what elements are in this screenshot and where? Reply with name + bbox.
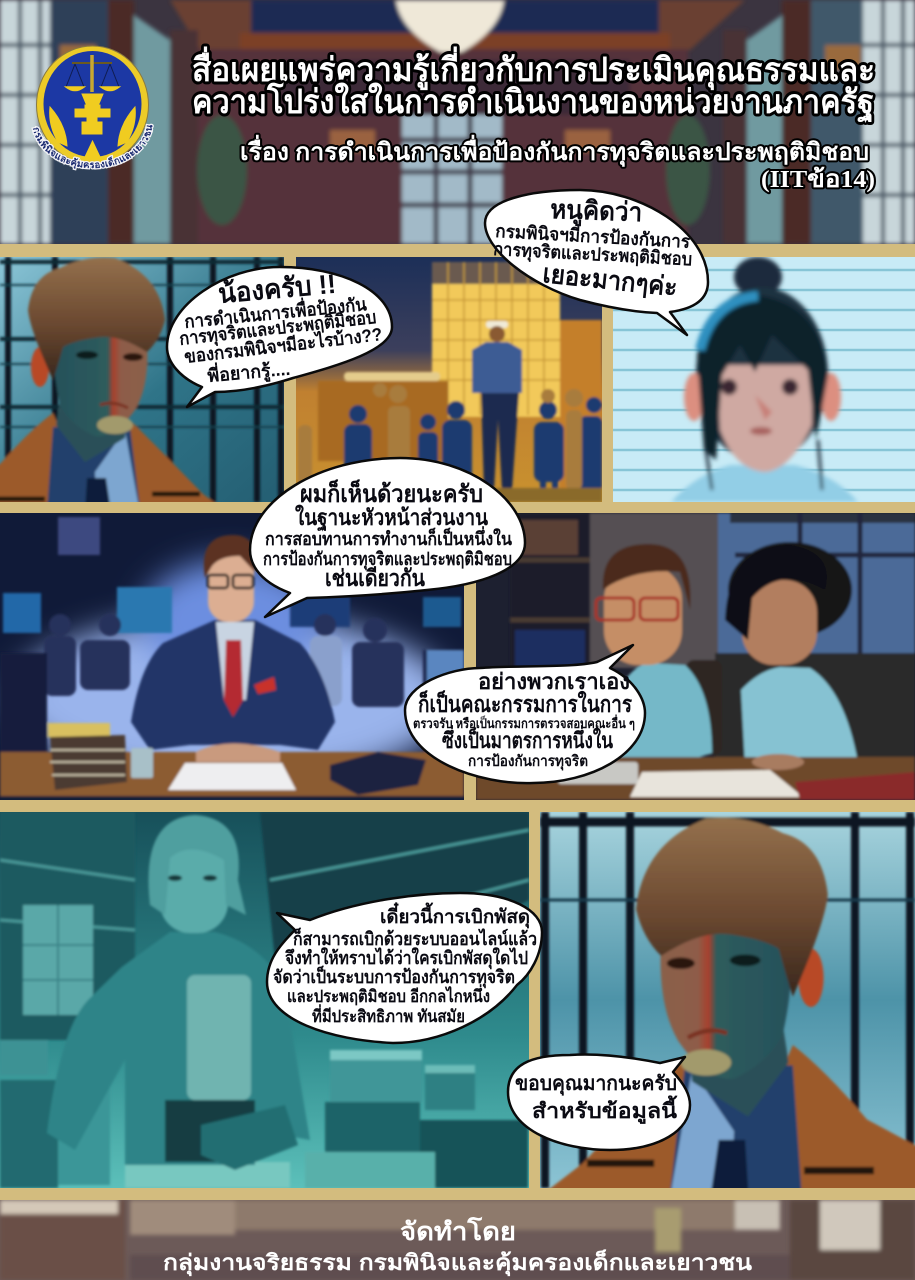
speech bubble: girl answer bbox=[485, 190, 708, 335]
footer heading: จัดทำโดย bbox=[400, 1216, 516, 1246]
panel: officer and children bbox=[296, 257, 602, 502]
bubble text: ตรวจรับ หรือเป็นกรรมการตรวจสอบคณะอื่น ๆ bbox=[413, 714, 635, 731]
title: ความโปร่งใสในการดำเนินงานของหน่วยงานภาครัฐ bbox=[192, 82, 874, 123]
speech bubble: warehouse bbox=[267, 893, 542, 1043]
bubble text: การทุจริตและประพฤติมิชอบ bbox=[493, 239, 693, 271]
bubble text: และประพฤติมิชอบ อีกกลไกหนึ่ง bbox=[287, 984, 490, 1006]
bubble text: ซึ่งเป็นมาตรการหนึ่งใน bbox=[442, 724, 613, 753]
desk books and glass bbox=[48, 723, 426, 795]
bubble text: อย่างพวกเราเอง bbox=[478, 669, 630, 694]
bubble text: กรมพินิจฯมีการป้องกันการ bbox=[495, 221, 691, 252]
character: girl bbox=[671, 257, 858, 502]
title bbox=[192, 46, 875, 123]
boy with red glasses bbox=[596, 544, 712, 760]
icon: scales and pedestal bbox=[50, 55, 135, 159]
bubble text bbox=[273, 902, 537, 1026]
children bbox=[344, 397, 602, 502]
footer panel bbox=[0, 1200, 915, 1280]
bubble text bbox=[178, 269, 383, 388]
panel: young man thanks bbox=[524, 812, 915, 1208]
bubble text: การสอบทานการทำงานก็เป็นหนึ่งใน bbox=[265, 526, 513, 549]
title: สื่อเผยแพร่ความรู้เกี่ยวกับการประเมินคุณธรรมและ bbox=[192, 46, 875, 91]
bubble text: จัดว่าเป็นระบบการป้องกันการทุจริต bbox=[273, 965, 515, 989]
bubble text: ขอบคุณมากนะครับ bbox=[515, 1073, 677, 1096]
bubble text: ก็เป็นคณะกรรมการในการ bbox=[418, 689, 633, 717]
panel: young man asks bbox=[0, 257, 284, 525]
bubble text: เดี๋ยวนี้การเบิกพัสดุ bbox=[380, 902, 530, 929]
panel: warehouse woman bbox=[0, 812, 529, 1188]
logo caption: กรมพินิจและคุ้มครองเด็กและเยาวชน bbox=[31, 124, 154, 170]
panel: girl answers bbox=[613, 257, 915, 502]
background staff bbox=[44, 614, 404, 707]
bubble text: หนูคิดว่า bbox=[550, 194, 643, 229]
panel: committee colleagues bbox=[476, 513, 915, 800]
logo: department emblem bbox=[31, 46, 154, 170]
bubble text bbox=[263, 479, 513, 591]
character: young man bbox=[0, 257, 218, 502]
bubble text: น้องครับ !! bbox=[217, 269, 337, 309]
bubble text bbox=[493, 194, 693, 302]
bubble text: เช่นเดียวกัน bbox=[325, 565, 425, 591]
bubble text: พี่อยากรู้.... bbox=[206, 356, 291, 388]
header panel bbox=[0, 0, 915, 244]
bubble text: เยอะมากๆค่ะ bbox=[541, 258, 679, 302]
footer organization: กลุ่มงานจริยธรรม กรมพินิจและคุ้มครองเด็กและเยาวชน bbox=[163, 1248, 752, 1277]
bubble text: ในฐานะหัวหน้าส่วนงาน bbox=[295, 504, 488, 532]
bubble text bbox=[413, 669, 635, 771]
subtitle: (IITข้อ14) bbox=[761, 166, 875, 193]
bubble text: ก็สามารถเบิกด้วยระบบออนไลน์แล้ว bbox=[293, 927, 537, 949]
desk and papers bbox=[476, 754, 915, 800]
panel: supervisor at desk bbox=[0, 513, 464, 800]
bubble text: สำหรับข้อมูลนี้ bbox=[532, 1095, 678, 1125]
girl with bob hair bbox=[725, 542, 858, 765]
speech bubble: boy question bbox=[167, 267, 392, 407]
bubble text bbox=[515, 1073, 678, 1125]
subtitle: เรื่อง การดำเนินการเพื่อป้องกันการทุจริตและประพฤติมิชอบ bbox=[240, 134, 869, 168]
speech bubble: supervisor bbox=[250, 458, 525, 617]
subtitle bbox=[240, 134, 875, 193]
character: young man close-up bbox=[548, 816, 915, 1188]
bubble text: จึงทำให้ทราบได้ว่าใครเบิกพัสดุใดไป bbox=[285, 947, 528, 970]
officer bbox=[472, 321, 522, 490]
bubble text: การทุจริตและประพฤติมิชอบ bbox=[178, 307, 377, 351]
woman bbox=[47, 815, 310, 1170]
speech bubble: thanks bbox=[508, 1055, 690, 1150]
bubble text: การดำเนินการเพื่อป้องกัน bbox=[183, 291, 368, 332]
speech bubble: committee bbox=[405, 645, 645, 783]
bubble text: ผมก็เห็นด้วยนะครับ bbox=[300, 479, 483, 508]
bubble text: การป้องกันการทุจริต bbox=[468, 752, 588, 771]
bubble text: ของกรมพินิจฯมีอะไรบ้าง?? bbox=[183, 323, 383, 367]
supervisor bbox=[131, 535, 335, 762]
bubble text: ที่มีประสิทธิภาพ ทันสมัย bbox=[312, 1004, 465, 1026]
bubble text: การป้องกันการทุจริตและประพฤติมิชอบ bbox=[263, 549, 512, 571]
